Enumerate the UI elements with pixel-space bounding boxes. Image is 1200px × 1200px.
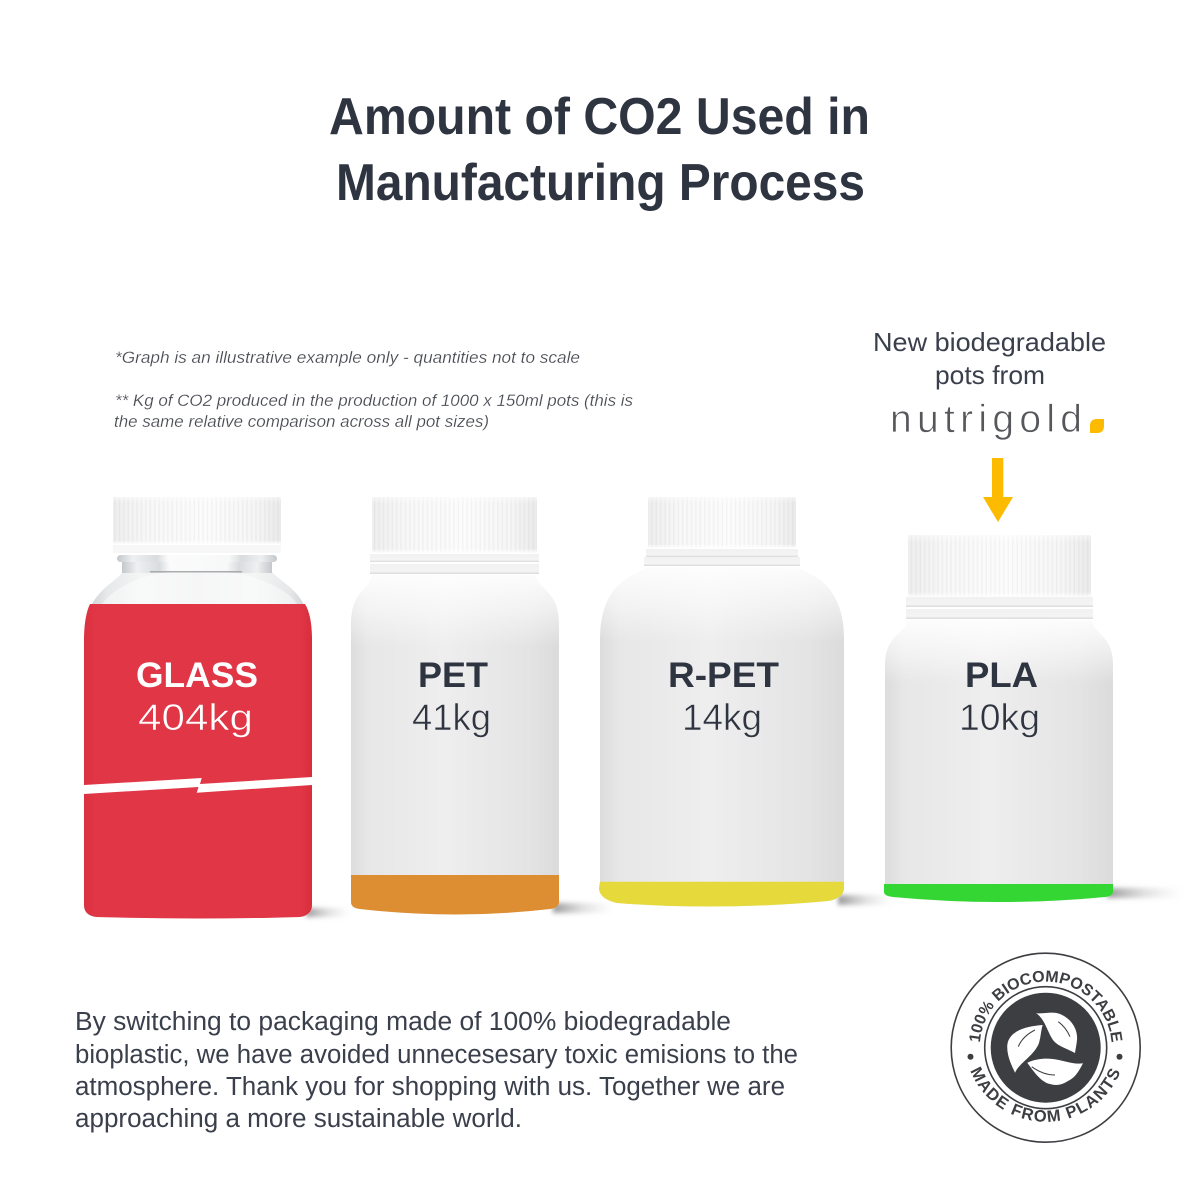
bottle: R-PET: R-PET	[668, 656, 779, 695]
closing paragraph	[75, 1008, 798, 1133]
bottle: PLA: PLA	[965, 656, 1038, 695]
callout: new biodegradable pots	[873, 327, 1106, 390]
bottle: R-PET: 14kg	[682, 697, 762, 738]
disclaimer notes: *Graph is an illustrative example only - quantities not to scale	[115, 349, 580, 367]
badge: 100% biocompostable: MADE FROM PLANTS	[970, 1066, 1120, 1122]
title: Amount of CO2 Used in	[329, 88, 870, 146]
closing paragraph: atmosphere. Thank you for shopping with us. Together we are	[75, 1073, 785, 1101]
badge: 100% biocompostable	[950, 952, 1141, 1143]
bottle: PET: PET	[418, 656, 488, 695]
arrow pointing to PLA pot	[983, 458, 1013, 522]
disclaimer notes: the same relative comparison across all pot sizes)	[114, 413, 489, 431]
bottle: PET	[351, 497, 559, 914]
bottle: glass	[84, 497, 312, 918]
closing paragraph: By switching to packaging made of 100% biodegradable	[75, 1008, 731, 1036]
floor shadows	[306, 888, 1182, 917]
callout: new biodegradable pots: New biodegradable	[873, 327, 1106, 357]
nutrigold logo: nutrigold	[890, 398, 1082, 441]
bottle: R-PET	[599, 497, 844, 907]
bottle: PET: 41kg	[412, 697, 491, 738]
callout: new biodegradable pots: pots from	[935, 360, 1045, 390]
closing paragraph: bioplastic, we have avoided unnecesesary toxic emisions to the	[75, 1041, 798, 1069]
closing paragraph: approaching a more sustainable world.	[75, 1105, 522, 1133]
badge: 100% biocompostable: 100% BIOCOMPOSTABLE	[969, 970, 1122, 1042]
bottle: glass: 404kg	[138, 697, 253, 738]
title: Manufacturing Process	[336, 154, 865, 212]
disclaimer notes	[114, 349, 633, 431]
bottle: PLA	[884, 535, 1113, 902]
bottle: glass: GLASS	[136, 656, 258, 695]
title	[329, 88, 870, 212]
bottle: PLA: 10kg	[959, 697, 1040, 738]
disclaimer notes: ** Kg of CO2 produced in the production of 1000 x 150ml pots (this is	[115, 392, 633, 410]
